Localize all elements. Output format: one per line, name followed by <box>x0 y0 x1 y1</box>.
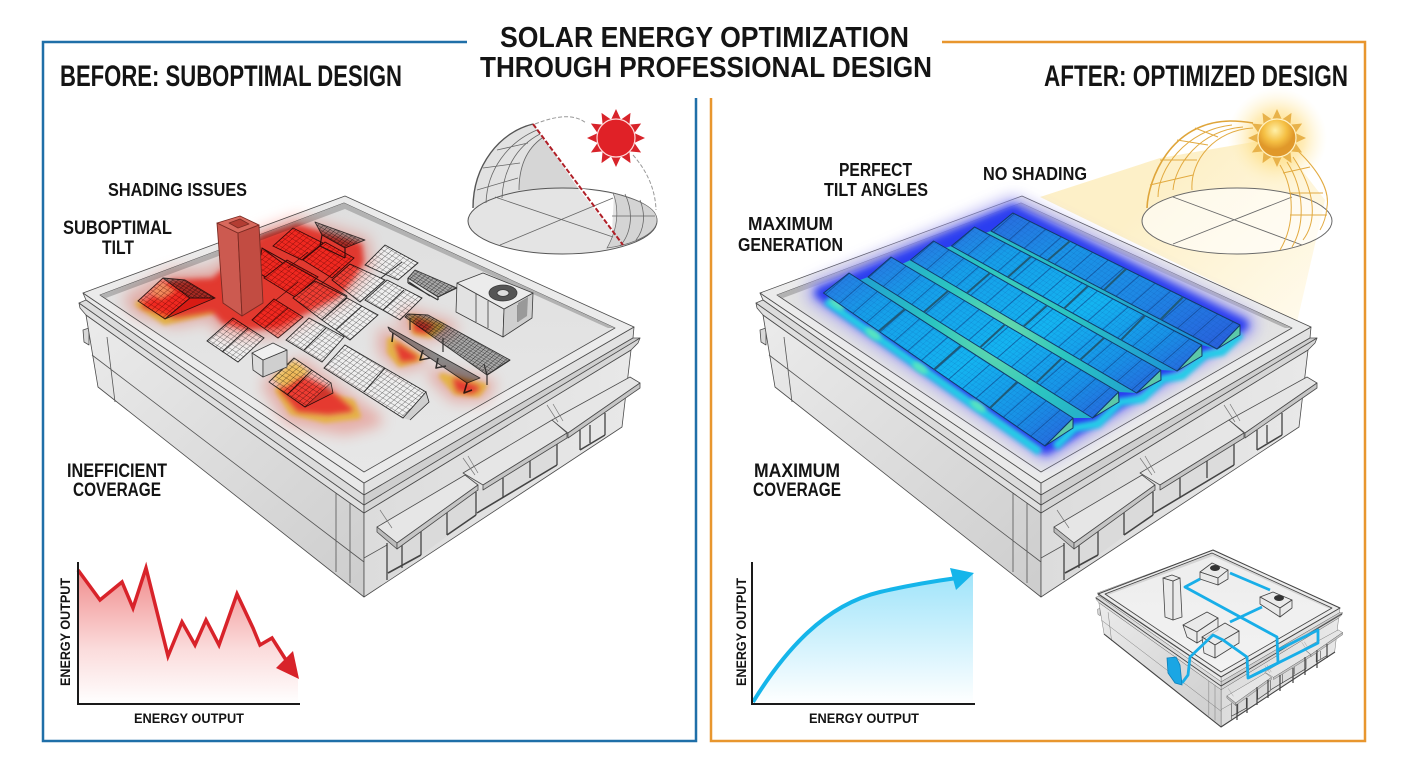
chart: declining energy output: ENERGY OUTPUT <box>134 710 244 726</box>
heat map: shading hot spots <box>131 223 488 428</box>
rooftop box <box>252 343 287 377</box>
sun glow <box>1227 88 1327 188</box>
label: suboptimal tilt <box>63 218 172 259</box>
blue conduit routes <box>1182 573 1318 683</box>
label: perfect tilt angles <box>824 160 928 200</box>
label: maximum coverage <box>753 461 841 501</box>
sun path dome: after <box>1142 121 1332 254</box>
mini AC fans <box>1210 565 1284 601</box>
label: maximum generation: GENERATION <box>738 235 843 255</box>
heading: before: BEFORE: SUBOPTIMAL DESIGN <box>60 60 402 93</box>
label: maximum generation: MAXIMUM <box>748 214 833 234</box>
panel: after <box>733 88 1343 727</box>
panel: before <box>57 109 657 726</box>
solar array: row 3 <box>910 241 1161 393</box>
title: THROUGH PROFESSIONAL DESIGN <box>480 52 932 84</box>
sunlight beam <box>1040 138 1325 322</box>
solar panels: shaded red group <box>138 228 354 338</box>
chart: declining energy output <box>57 562 300 726</box>
chart: rising energy output: ENERGY OUTPUT <box>809 710 919 726</box>
frame: after panel <box>711 42 1365 741</box>
label: perfect tilt angles: TILT ANGLES <box>824 180 928 200</box>
icon: golden sun <box>1248 109 1306 167</box>
solar array: row 5 <box>991 213 1240 349</box>
label: inefficient coverage: COVERAGE <box>73 480 161 501</box>
mini roof equipment <box>1163 563 1292 658</box>
label: maximum generation <box>738 214 843 255</box>
sun path dome: before <box>468 117 657 254</box>
icon: red sun <box>587 109 645 167</box>
chart: rising energy output <box>733 562 975 726</box>
building: before <box>79 196 640 597</box>
title <box>480 22 932 84</box>
chart: declining energy output: ENERGY OUTPUT <box>57 578 73 686</box>
label: maximum coverage: MAXIMUM <box>754 461 840 482</box>
label: suboptimal tilt: SUBOPTIMAL <box>63 218 172 239</box>
label: shading issues: SHADING ISSUES <box>108 180 247 200</box>
solar array: row 4 <box>952 227 1202 371</box>
title: SOLAR ENERGY OPTIMIZATION <box>500 22 909 54</box>
label: maximum coverage: COVERAGE <box>753 480 841 501</box>
label: inefficient coverage: INEFFICIENT <box>67 461 167 482</box>
frame: before panel <box>43 42 696 741</box>
inset: mini building wiring diagram <box>1096 550 1343 727</box>
chart: rising energy output: ENERGY OUTPUT <box>733 578 749 686</box>
heat map: even irradiance glow <box>821 211 1242 452</box>
chimney casting shade <box>217 216 263 316</box>
mini building outlines <box>1096 550 1342 727</box>
building: after <box>756 196 1317 597</box>
solar panels: unshaded grey group <box>207 245 429 420</box>
solar array: row 2 <box>868 257 1119 418</box>
label: perfect tilt angles: PERFECT <box>839 160 912 180</box>
label: inefficient coverage <box>67 461 167 501</box>
solar array: row 1 <box>824 273 1073 446</box>
label: suboptimal tilt: TILT <box>102 238 134 259</box>
label: no shading: NO SHADING <box>983 164 1087 184</box>
blue inverter box <box>1167 657 1182 685</box>
tilted racks <box>163 222 510 393</box>
solar array: gaps between rows <box>860 231 1217 418</box>
rooftop AC unit <box>456 273 533 337</box>
